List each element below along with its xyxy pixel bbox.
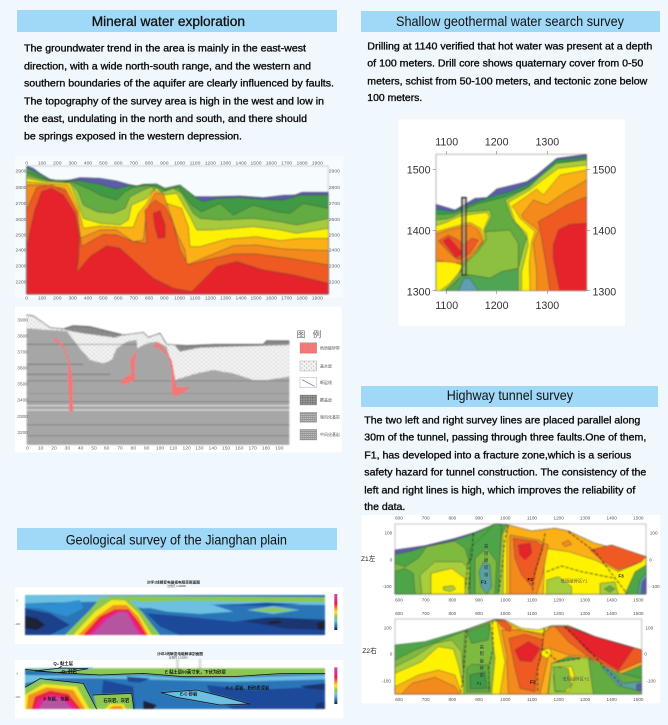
axis labels: top scale: 200 <box>53 161 62 167</box>
section Z1 labels: F3 <box>618 573 624 578</box>
axis labels: 3200 <box>17 430 28 436</box>
axis labels: -100 <box>14 695 21 699</box>
section Z2 labels: 低阻破碎区Y2 <box>562 676 590 683</box>
colour scale <box>334 594 337 630</box>
axis labels: top scale: 800 <box>145 161 153 167</box>
section Z1 labels: 0 <box>649 557 652 562</box>
chart title <box>157 651 203 660</box>
section Z2 <box>395 619 642 694</box>
axis labels: depth scales: 2300 <box>15 264 27 270</box>
axis labels: top scale: 0 <box>25 161 28 167</box>
legend <box>297 328 340 440</box>
legend: 断层线 <box>320 379 332 385</box>
axis labels: 130 <box>195 445 204 451</box>
axis labels: bottom scale: 100 <box>38 296 46 302</box>
axis labels: top scale: 500 <box>99 161 108 167</box>
section Z1 labels: 900 <box>475 598 483 603</box>
axis labels: top scale: 400 <box>84 161 92 167</box>
axis labels: 1300 <box>535 300 559 312</box>
section Z2 labels: 1500 <box>633 611 644 616</box>
axis labels: bottom scale: 400 <box>84 296 92 302</box>
text block: shallow geothermal description <box>367 40 652 104</box>
text block: tunnel description <box>364 415 646 513</box>
geology labels: Q₃ 砂岩 <box>62 668 78 675</box>
section Z1 labels: 1000 <box>500 515 511 520</box>
axis labels: bottom scale: 700 <box>130 296 138 302</box>
axis labels: 3800 <box>17 333 28 339</box>
section Z1 labels: -100 <box>382 584 392 589</box>
panel: Shallow geothermal heading <box>361 11 660 32</box>
legend: 盖水层 <box>320 362 332 368</box>
borehole marker <box>462 198 466 275</box>
text block: mineral water description: be springs exposed in the western depression. <box>24 130 242 142</box>
section Z2 labels: 1100 <box>527 697 537 702</box>
axis labels: bottom scale: 1400 <box>235 296 247 302</box>
axis labels: top scale: 1900 <box>312 161 323 167</box>
section Z1 labels: 1100 <box>527 598 537 603</box>
geology labels: E-C 泥岩、粉砂质泥岩 <box>226 684 270 691</box>
section Z1 labels: 800 <box>448 515 457 520</box>
axis labels: top scale: 1200 <box>205 161 216 167</box>
text block: tunnel description: left and right lines is high, which improves the reliability of <box>364 484 635 496</box>
axis labels: top scale: 1300 <box>220 161 231 167</box>
axis labels: 100 <box>156 445 164 451</box>
axis labels <box>407 137 616 312</box>
text block: mineral water description <box>24 43 334 143</box>
section Z1 labels: 800 <box>448 598 457 603</box>
axis labels <box>14 672 21 699</box>
section Z1 labels: 1100 <box>527 515 537 520</box>
section Z1 labels: 700 <box>422 598 430 603</box>
text block: tunnel description: F1, has developed into a fracture zone,which is a serious <box>364 450 631 462</box>
axis labels: top scale: 1500 <box>250 161 262 167</box>
axis labels: top scale: 1100 <box>190 161 201 167</box>
section Z1 labels: 1300 <box>580 598 591 603</box>
section Z2 labels: 1000 <box>500 611 511 616</box>
axis labels: depth scales: 2900 <box>329 168 340 174</box>
panel: Shallow geothermal heading: Shallow geothermal water search survey <box>396 13 624 29</box>
axis labels: 160 <box>235 445 244 451</box>
text block: shallow geothermal description: 100 meters. <box>367 92 422 104</box>
axis labels: 1200 <box>485 300 509 312</box>
section Z2 labels: Z2右 <box>362 646 377 655</box>
text block: shallow geothermal description: of 100 meters. Drill core shows quaternary cover from 0-50 <box>367 58 643 70</box>
axis labels: bottom scale <box>25 296 323 302</box>
section Z1 labels: 100 <box>650 531 658 536</box>
section Z2 labels: 700 <box>422 697 430 702</box>
section Z1 labels: 1500 <box>633 598 644 603</box>
axis labels: 1200 <box>485 137 509 149</box>
section Z2 labels: 800 <box>448 611 457 616</box>
legend: 例 <box>313 328 321 339</box>
text block: mineral water description: The topography of the survey area is high in the west and low in <box>24 95 324 107</box>
axis labels: top scale: 1400 <box>235 161 247 167</box>
geology labels <box>43 660 270 704</box>
axis labels: bottom scale: 800 <box>145 296 153 302</box>
axis labels: bottom scale: 1700 <box>281 296 292 302</box>
chart title <box>147 579 200 588</box>
chart: geothermal contour section with borehole <box>398 119 625 326</box>
axis labels: 3600 <box>17 366 28 372</box>
section Z2 labels: 高 <box>480 643 485 650</box>
chart: resistivity contour section <box>15 156 343 302</box>
section Z2 labels: 100 <box>384 625 392 630</box>
section Z2 labels: 1400 <box>606 697 617 702</box>
section Z1 labels: 700 <box>422 515 430 520</box>
axis labels: top scale: 1800 <box>296 161 308 167</box>
axis labels: 3500 <box>17 382 28 388</box>
axis labels: depth scales: 2900 <box>15 168 27 174</box>
section Z2 labels: 1500 <box>633 697 644 702</box>
section Z1 labels: 碎 <box>484 564 489 571</box>
legend: 图 <box>297 329 305 339</box>
section Z2 labels: 900 <box>475 697 483 702</box>
panel: Jianghan plain heading <box>17 528 337 550</box>
text block: shallow geothermal description: Drilling at 1140 verified that hot water was present at a depth <box>367 40 652 52</box>
geology labels: 石灰岩、灰岩 <box>103 697 130 704</box>
axis labels: bottom scale: 1500 <box>250 296 262 302</box>
axis labels: bottom scale: 300 <box>69 296 77 302</box>
axis labels: bottom scale: 1100 <box>190 296 201 302</box>
fault lines Z1 <box>466 525 627 593</box>
axis labels: 40 <box>78 445 84 451</box>
axis labels: 1300 <box>592 287 616 299</box>
section Z2 labels <box>362 611 656 702</box>
chart title: 沙坪1线瞬变电磁视电阻率断面图 <box>147 579 200 584</box>
section Z2 labels: 1400 <box>606 611 617 616</box>
axis labels: 70 <box>117 445 123 451</box>
section Z1 labels: F2 <box>527 577 533 583</box>
axis labels: bottom scale: 1300 <box>220 296 231 302</box>
axis labels: bottom scale: 900 <box>160 296 169 302</box>
chart: Jianghan resistivity section <box>14 579 343 718</box>
text block: shallow geothermal description: meters, schist from 50-100 meters, and tectonic zone below <box>367 76 648 88</box>
interpreted boundaries <box>25 666 325 709</box>
axis labels: depth scales: 2300 <box>329 264 340 270</box>
section Z1 labels: F1 <box>481 579 487 584</box>
section Z2 labels: F2 <box>530 679 536 685</box>
axis labels: top scale: 700 <box>130 161 138 167</box>
fracture zone bodies <box>51 338 190 412</box>
panel: Mineral water exploration heading: Mineral water exploration <box>92 13 245 29</box>
axis labels: 10 <box>38 445 44 451</box>
text block: tunnel description: The two left and right survey lines are placed parallel along <box>364 415 640 427</box>
panel: Jianghan plain heading: Geological survey of the Jianghan plain <box>66 531 287 547</box>
section Z2 labels: 600 <box>395 697 403 702</box>
section Z2 labels: 0 <box>390 652 393 657</box>
section: interpreted geology <box>14 660 343 718</box>
axis labels: 190 <box>275 445 284 451</box>
chart: tunnel survey sections Z1 and Z2 <box>361 515 660 703</box>
section Z1 labels: 1500 <box>633 515 644 520</box>
section Z1 labels: 1200 <box>553 598 564 603</box>
panel: Highway tunnel heading: Highway tunnel survey <box>447 387 573 403</box>
axis labels: 60 <box>104 445 110 451</box>
chart: geological interpretation section <box>15 307 342 452</box>
axis labels: 1400 <box>407 225 431 237</box>
text block: tunnel description: safety hazard for tunnel construction. The consistency of the <box>364 467 646 479</box>
axis labels: bottom scale: 1600 <box>266 296 277 302</box>
axis labels: 1300 <box>407 287 431 299</box>
section Z2 labels: 800 <box>448 697 457 702</box>
axis labels: top scale <box>25 161 323 167</box>
axis labels: bottom scale: 500 <box>99 296 108 302</box>
axis labels: top scale: 900 <box>160 161 169 167</box>
section Z2 labels: 600 <box>395 611 403 616</box>
chart title: 比例尺 1:10000 <box>168 584 186 588</box>
axis labels: 140 <box>209 445 217 451</box>
legend: 中风化基岩 <box>320 431 340 437</box>
axis labels: 3300 <box>17 414 28 420</box>
section Z2 labels: 1200 <box>553 697 564 702</box>
text block: tunnel description: 30m of the tunnel, passing through three faults.One of them, <box>364 432 646 444</box>
axis labels: top scale: 600 <box>114 161 123 167</box>
panel: Highway tunnel heading <box>361 386 658 407</box>
text block: tunnel description: the data. <box>364 501 405 513</box>
axis labels: 3900 <box>17 317 28 323</box>
section Z1 labels <box>361 515 660 603</box>
axis labels: depth scales: 2600 <box>15 217 27 223</box>
axis labels: top scale: 300 <box>69 161 77 167</box>
section Z2 labels: 700 <box>422 611 430 616</box>
axis labels: bottom scale: 0 <box>25 296 28 302</box>
text block: mineral water description: The groundwater trend in the area is mainly in the east-west <box>24 43 306 55</box>
section Z1 labels: 阻 <box>484 550 489 557</box>
section Z2 labels: 碎 <box>480 665 485 672</box>
section Z1 labels: 1000 <box>500 598 511 603</box>
axis labels: bottom scale: 600 <box>114 296 123 302</box>
section Z1 labels: 0 <box>390 557 393 562</box>
axis labels: 1300 <box>535 137 559 149</box>
section Z2 labels: 1200 <box>553 611 564 616</box>
axis labels: depth scales: 2700 <box>15 201 27 207</box>
axis labels: depth scales: 2700 <box>329 201 340 207</box>
section Z2 labels: 0 <box>644 652 647 657</box>
section Z1 labels: Z1左 <box>361 554 376 563</box>
axis labels: 1100 <box>435 300 458 312</box>
section Z1 labels: 1200 <box>553 515 564 520</box>
axis labels: 0 <box>16 599 18 603</box>
axis labels: bottom scale: 1900 <box>312 296 323 302</box>
section Z1 labels: 100 <box>384 531 393 536</box>
axis labels: depth scales <box>15 168 340 286</box>
axis labels: 80 <box>131 445 136 451</box>
axis ticks <box>433 151 590 294</box>
section Z1 labels: 900 <box>475 515 483 520</box>
geology labels: Q₄ 黏土层 <box>53 660 74 667</box>
section Z1 labels: 破 <box>484 557 489 564</box>
axis labels: 170 <box>249 445 257 451</box>
axis labels: top scale: 100 <box>38 161 46 167</box>
axis labels: top scale: 1600 <box>266 161 277 167</box>
axis labels <box>14 599 21 626</box>
section Z1 <box>395 524 646 594</box>
axis labels: bottom scale: 200 <box>53 296 62 302</box>
section Z2 labels: 1300 <box>580 611 591 616</box>
axis labels: 0 <box>26 445 29 451</box>
section Z2 labels: -100 <box>646 678 656 683</box>
section Z2 labels: 1300 <box>580 697 591 702</box>
panel: Mineral water exploration heading <box>17 10 337 32</box>
axis labels: -100 <box>14 622 21 626</box>
chart title: 比例尺 1:10000 <box>169 656 188 660</box>
axis labels: depth scales: 2800 <box>329 185 340 191</box>
section Z2 labels: 带 <box>480 673 485 679</box>
axis labels: 180 <box>262 445 270 451</box>
axis labels <box>17 317 284 451</box>
axis labels: depth scales: 2200 <box>15 280 27 286</box>
axis labels: 90 <box>144 445 150 451</box>
axis labels: 3700 <box>17 350 28 356</box>
section Z1 labels: 1400 <box>606 598 617 603</box>
section Z1 labels: 600 <box>395 598 403 603</box>
axis labels: 1100 <box>435 137 458 149</box>
geology labels: E 黏土层00英寸米，下伏为砂层 <box>165 669 227 676</box>
section Z1 labels: 600 <box>395 515 403 520</box>
section Z2 labels: 阻 <box>480 650 485 657</box>
axis labels: 3400 <box>17 398 28 404</box>
axis labels: depth scales: 2400 <box>15 248 27 254</box>
section Z1 labels: 带 <box>484 572 489 578</box>
section Z1 labels: 低阻破碎区Y1 <box>561 578 588 585</box>
legend: 地质破碎带 <box>320 345 340 351</box>
legend: 覆盖层 <box>320 396 332 402</box>
section Z2 labels: 破 <box>480 657 485 664</box>
axis labels: depth scales: 2200 <box>329 280 340 286</box>
axis labels: 20 <box>51 445 57 451</box>
axis labels: top scale: 1000 <box>174 161 185 167</box>
fault lines Z2 <box>461 622 622 692</box>
geology labels: E-C 砂岩 <box>180 690 198 697</box>
section Z1 labels: 1300 <box>580 515 591 520</box>
axis labels: bottom scale: 1000 <box>174 296 185 302</box>
colour scale <box>334 667 337 704</box>
axis labels: depth scales: 2800 <box>15 185 27 191</box>
section Z2 labels: 1000 <box>500 697 511 702</box>
text block: mineral water description: the east, undulating in the north and south, and there should <box>24 113 307 125</box>
axis labels: depth scales: 2400 <box>329 248 340 254</box>
axis labels: 50 <box>91 445 97 451</box>
legend: 强风化基岩 <box>320 414 340 420</box>
axis labels: 0 <box>16 672 18 676</box>
section Z1 labels: 高 <box>484 542 489 549</box>
axis labels: depth scales: 2600 <box>329 217 340 223</box>
text block: mineral water description: direction, with a wide north-south range, and the western and <box>24 60 311 72</box>
axis labels: 1500 <box>407 165 431 177</box>
section Z1 labels: -100 <box>650 584 660 589</box>
section Z1 labels: 1400 <box>606 515 617 520</box>
chart title: 沙坪2线瞬变电磁解译剖面图 <box>157 651 203 656</box>
axis labels: bottom scale: 1800 <box>296 296 308 302</box>
axis labels: depth scales: 2500 <box>15 232 27 238</box>
geology labels: P 灰岩、灰岩 <box>43 696 70 703</box>
section Z2 labels: 900 <box>475 611 483 616</box>
axis labels: 120 <box>183 445 191 451</box>
section Z2 labels: F1 <box>477 681 482 686</box>
axis labels: 110 <box>169 445 178 451</box>
axis labels: top scale: 1700 <box>281 161 292 167</box>
section Z2 labels: 100 <box>645 625 654 630</box>
axis labels: bottom scale: 1200 <box>205 296 216 302</box>
axis labels: 150 <box>222 445 230 451</box>
section Z2 labels: 1100 <box>527 611 537 616</box>
axis labels: 1400 <box>592 225 616 237</box>
axis labels: 30 <box>65 445 70 451</box>
axis labels: 1500 <box>592 165 616 177</box>
axis labels: depth scales: 2500 <box>329 232 340 238</box>
text block: mineral water description: southern boundaries of the aquifer are clearly influenced by faults. <box>24 78 334 90</box>
section Z2 labels: -100 <box>382 678 391 683</box>
